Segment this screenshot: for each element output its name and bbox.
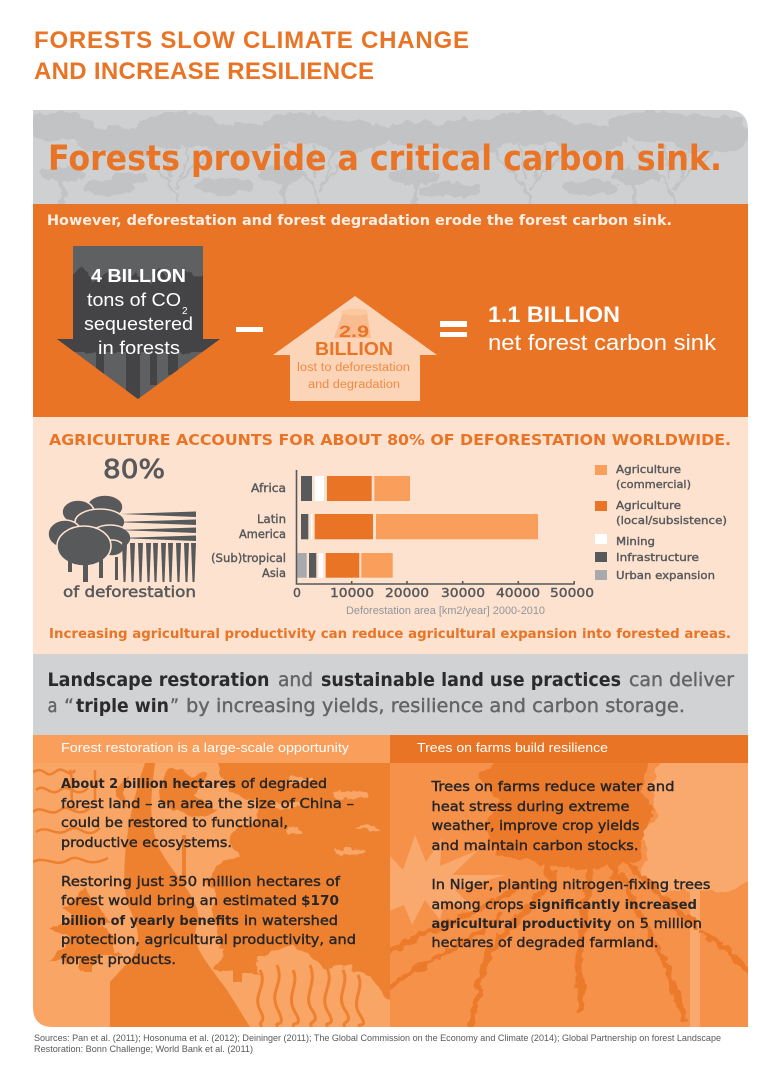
icon: trees and logs [48, 495, 196, 582]
text: restoration facts: forest products. [61, 952, 176, 968]
arrow: 2.9 billion lost: BILLION [315, 339, 393, 359]
sources: Restoration: Bonn Challenge; World Bank et al. (2011) [34, 1044, 253, 1054]
title: AND INCREASE RESILIENCE [34, 58, 374, 85]
icon: tree stump [334, 308, 371, 338]
caption: of deforestation: of deforestation [63, 583, 196, 601]
axis tick labels: 40000 [496, 585, 540, 600]
text: restoration facts: forest would bring an estimated [61, 893, 297, 909]
axis tick labels: 10000 [330, 585, 374, 600]
arrow: 2.9 billion lost [273, 296, 437, 401]
text: restoration facts: About 2 billion hectares [61, 776, 236, 792]
title: FORESTS SLOW CLIMATE CHANGE [34, 27, 469, 54]
text: farm facts: and maintain carbon stocks. [432, 838, 638, 854]
text: restoration facts: billion of yearly benefits [61, 913, 239, 929]
legend: Agriculture [616, 499, 681, 512]
panel: carbon equation [33, 204, 748, 417]
text: farm facts: on 5 million [617, 916, 702, 932]
panel: triple win: Landscape restoration [48, 669, 270, 691]
text: restoration facts: could be restored to functional, [61, 815, 288, 831]
text: restoration facts: of degraded [241, 776, 327, 792]
sources [34, 1033, 721, 1054]
legend [595, 463, 727, 582]
panel: triple win: ” [170, 695, 179, 717]
result: net sink [488, 302, 717, 355]
text: farm facts [430, 779, 710, 951]
panel: agriculture [33, 417, 748, 654]
legend: Infrastructure [616, 551, 699, 564]
legend: Mining [616, 535, 655, 548]
legend: Urban expansion [616, 569, 715, 582]
bar chart: deforestation area by driver [211, 470, 594, 617]
text: restoration facts: protection, agricultural productivity, and [61, 932, 356, 948]
text: farm facts: Trees on farms reduce water and [430, 779, 674, 795]
text: farm facts: heat stress during extreme [432, 799, 630, 815]
heading: carbon sink: Forests provide a critical carbon sink. [48, 139, 722, 179]
legend: (local/subsistence) [616, 514, 727, 527]
light palm and tree [390, 763, 748, 1027]
arrow: 4 billion sequestered: 4 BILLION [91, 266, 186, 286]
panel: triple win: sustainable land use practices [321, 669, 621, 691]
text: restoration facts: forest land – an area the size of China – [61, 796, 354, 812]
dark tree and roots [385, 755, 755, 1027]
panel: triple win [33, 654, 748, 735]
header: forest restoration [33, 735, 390, 763]
text: restoration facts: productive ecosystems. [61, 835, 232, 851]
bars: Subtropical Asia [297, 553, 393, 578]
header: trees on farms: Trees on farms build resilience [417, 740, 608, 755]
icon: minus [236, 327, 263, 332]
panel: triple win: triple win [76, 695, 169, 717]
text: farm facts: among crops [432, 897, 524, 913]
text: farm facts: weather, improve crop yields [432, 818, 640, 834]
illustration: farm trees and roots [390, 763, 748, 1027]
header: forest restoration: Forest restoration is a large-scale opportunity [61, 740, 350, 755]
text: restoration facts: in watershed [244, 913, 338, 929]
panel: trees on farms [380, 735, 760, 1027]
axis tick labels: 20000 [385, 585, 429, 600]
subheading: However, deforestation and forest degradation erode the forest carbon sink. [47, 213, 672, 229]
text: restoration facts: $170 [301, 893, 339, 909]
legend: Agriculture [616, 463, 681, 476]
text: farm facts: significantly increased [529, 897, 697, 913]
arrow: 2.9 billion lost: lost to deforestation [297, 362, 410, 374]
heading: agriculture: AGRICULTURE ACCOUNTS FOR ABOUT 80% OF DEFORESTATION WORLDWIDE. [49, 431, 731, 449]
result: net sink: 1.1 BILLION [488, 302, 620, 327]
category labels: Africa [251, 481, 286, 495]
axis title: Deforestation area [km2/year] 2000-2010 [346, 605, 545, 617]
statistic: 80%: 80% [103, 455, 165, 485]
text: farm facts: hectares of degraded farmland. [432, 935, 658, 951]
panel: triple win: and [278, 669, 313, 691]
bars: Africa [301, 476, 410, 501]
arrow: 4 billion sequestered: tons of CO [87, 290, 181, 310]
category labels [211, 481, 286, 580]
axis tick labels: 30000 [441, 585, 485, 600]
category labels: Latin [257, 512, 286, 526]
category labels: America [239, 527, 286, 541]
text: agricultural productivity note: Increasing agricultural productivity can reduce agricultural expansion into forested areas. [49, 626, 731, 642]
icon: equals [440, 321, 467, 337]
panel: triple win: “ [64, 695, 74, 717]
illustration: forest landscape [33, 750, 400, 1027]
arrow: 2.9 billion lost: and degradation [308, 379, 400, 391]
sources: Sources: Pan et al. (2011); Hosonuma et al. (2012); Deininger (2011); The Global Commission on the Economy and Climate (2014); Global Partnership on forest Landscape [34, 1033, 721, 1043]
arrow: 2.9 billion lost: 2.9 [339, 322, 369, 341]
category labels: Asia [262, 566, 286, 580]
panel: triple win: by increasing yields, resilience and carbon storage. [186, 695, 685, 717]
text: restoration facts: Restoring just 350 million hectares of [61, 874, 341, 890]
illustration: forest silhouette [26, 111, 752, 208]
category labels: (Sub)tropical [211, 551, 286, 565]
header: trees on farms [390, 735, 748, 763]
axis tick labels: 50000 [550, 585, 594, 600]
arrow: 4 billion sequestered: in forests [98, 338, 180, 358]
arrow: 4 billion sequestered: sequestered [84, 314, 193, 334]
result: net sink: net forest carbon sink [488, 330, 717, 355]
text: farm facts: agricultural productivity [432, 916, 612, 932]
arrow: 4 billion sequestered [50, 246, 225, 400]
panel: triple win: can deliver [629, 669, 734, 691]
panel: carbon sink banner [26, 110, 752, 208]
panel: triple win: a [48, 695, 58, 717]
legend: (commercial) [616, 478, 691, 491]
bars: Latin America [301, 514, 538, 539]
axis tick labels: 0 [293, 585, 301, 600]
panel: forest restoration [33, 735, 400, 1027]
arrow: 4 billion sequestered: 2 [182, 306, 188, 317]
text: restoration facts [61, 776, 356, 968]
text: farm facts: In Niger, planting nitrogen-fixing trees [432, 877, 710, 893]
axis tick labels [293, 585, 594, 600]
title [34, 27, 469, 85]
axes [296, 470, 575, 584]
